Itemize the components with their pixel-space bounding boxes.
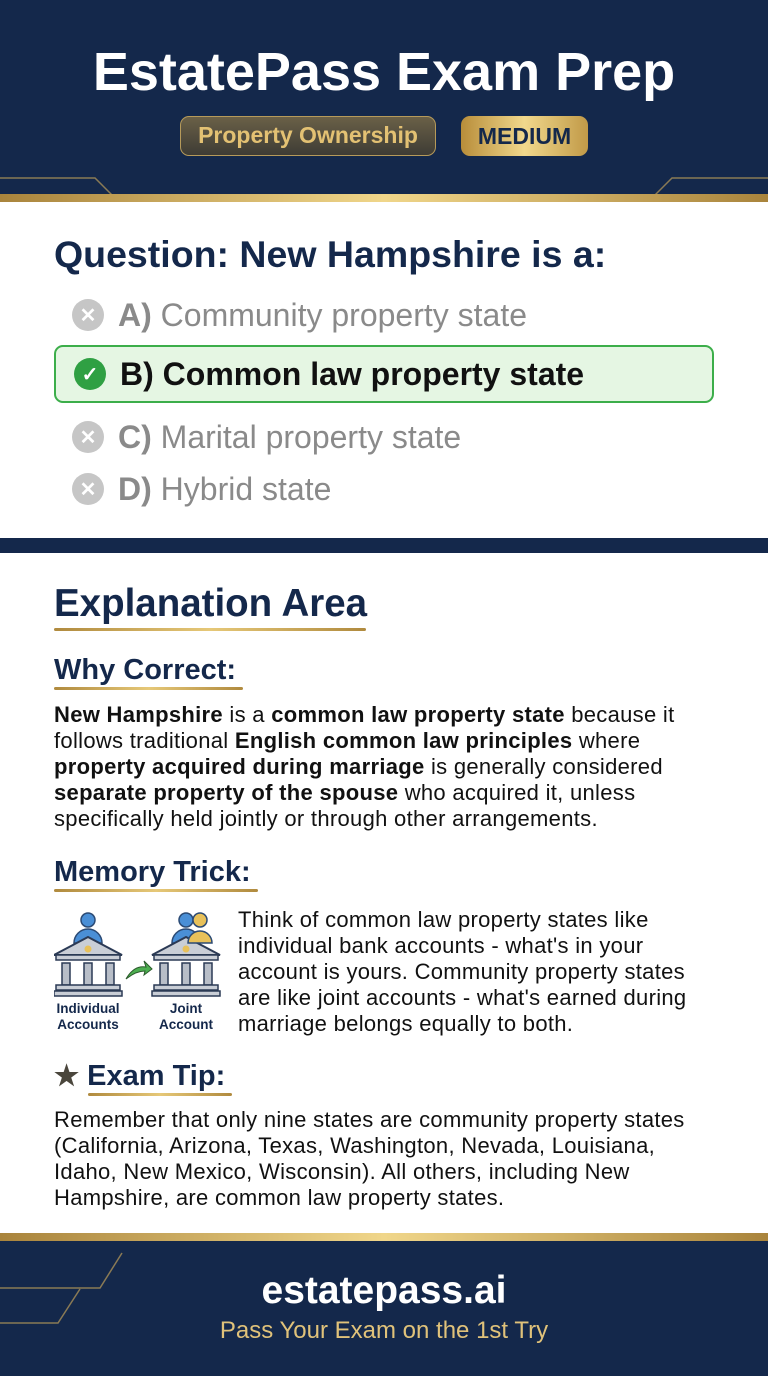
icon: banks [54, 912, 221, 1032]
header [0, 0, 768, 202]
memory trick text: account is yours. Community property states [238, 959, 685, 984]
footer [0, 1233, 768, 1376]
why correct text: property acquired during marriage is generally considered [54, 754, 663, 779]
option C: Marital property state [161, 418, 461, 454]
exam tip text [54, 1107, 685, 1210]
option C: ✕ [80, 426, 96, 448]
option B correct: ✓ [82, 364, 98, 386]
option A: A) [118, 296, 152, 332]
title: EstatePass Exam Prep [93, 42, 675, 102]
explanation heading: Explanation Area [54, 582, 367, 625]
option A: ✕ [80, 304, 96, 326]
why correct text: specifically held jointly or through other arrangements. [54, 806, 598, 831]
pill: difficulty: MEDIUM [478, 123, 571, 149]
option C: C) [118, 418, 152, 454]
option B correct: B) Common law property state [120, 356, 584, 392]
option B correct [54, 345, 714, 403]
option D: ✕ [80, 478, 96, 500]
pill: topic [180, 116, 436, 156]
option D: D) [118, 470, 152, 506]
why correct text: follows traditional English common law principles where [54, 728, 640, 753]
question heading: Question: New Hampshire is a: [54, 233, 606, 275]
why correct text: New Hampshire is a common law property state because it [54, 702, 675, 727]
footer tagline: Pass Your Exam on the 1st Try [220, 1317, 548, 1344]
pill: difficulty [461, 116, 588, 156]
icon: banks: Joint Account [159, 1001, 213, 1032]
exam tip text: (California, Arizona, Texas, Washington, Nevada, Louisiana, [54, 1133, 655, 1158]
memory trick text: individual bank accounts - what's in your [238, 933, 643, 958]
memory trick text: Think of common law property states like [238, 907, 649, 932]
memory trick text [238, 907, 686, 1036]
option D [72, 470, 331, 506]
why correct text: separate property of the spouse who acquired it, unless [54, 780, 635, 805]
memory trick text: marriage belongs equally to both. [238, 1011, 573, 1036]
icon: banks: Individual Accounts [56, 1001, 120, 1032]
footer site: estatepass.ai [262, 1269, 506, 1312]
exam tip text: Idaho, New Mexico, Wisconsin). All others, including New [54, 1159, 630, 1184]
why correct text [54, 702, 675, 831]
memory trick heading: Memory Trick: [54, 856, 251, 888]
exam tip heading: ★ Exam Tip: [54, 1060, 225, 1092]
exam tip text: Remember that only nine states are community property states [54, 1107, 685, 1132]
why correct heading: Why Correct: [54, 654, 236, 686]
exam tip text: Hampshire, are common law property states. [54, 1185, 504, 1210]
pill: topic: Property Ownership [198, 122, 418, 148]
option A: Community property state [161, 296, 527, 332]
memory trick text: are like joint accounts - what's earned during [238, 985, 686, 1010]
option D: Hybrid state [161, 470, 331, 506]
